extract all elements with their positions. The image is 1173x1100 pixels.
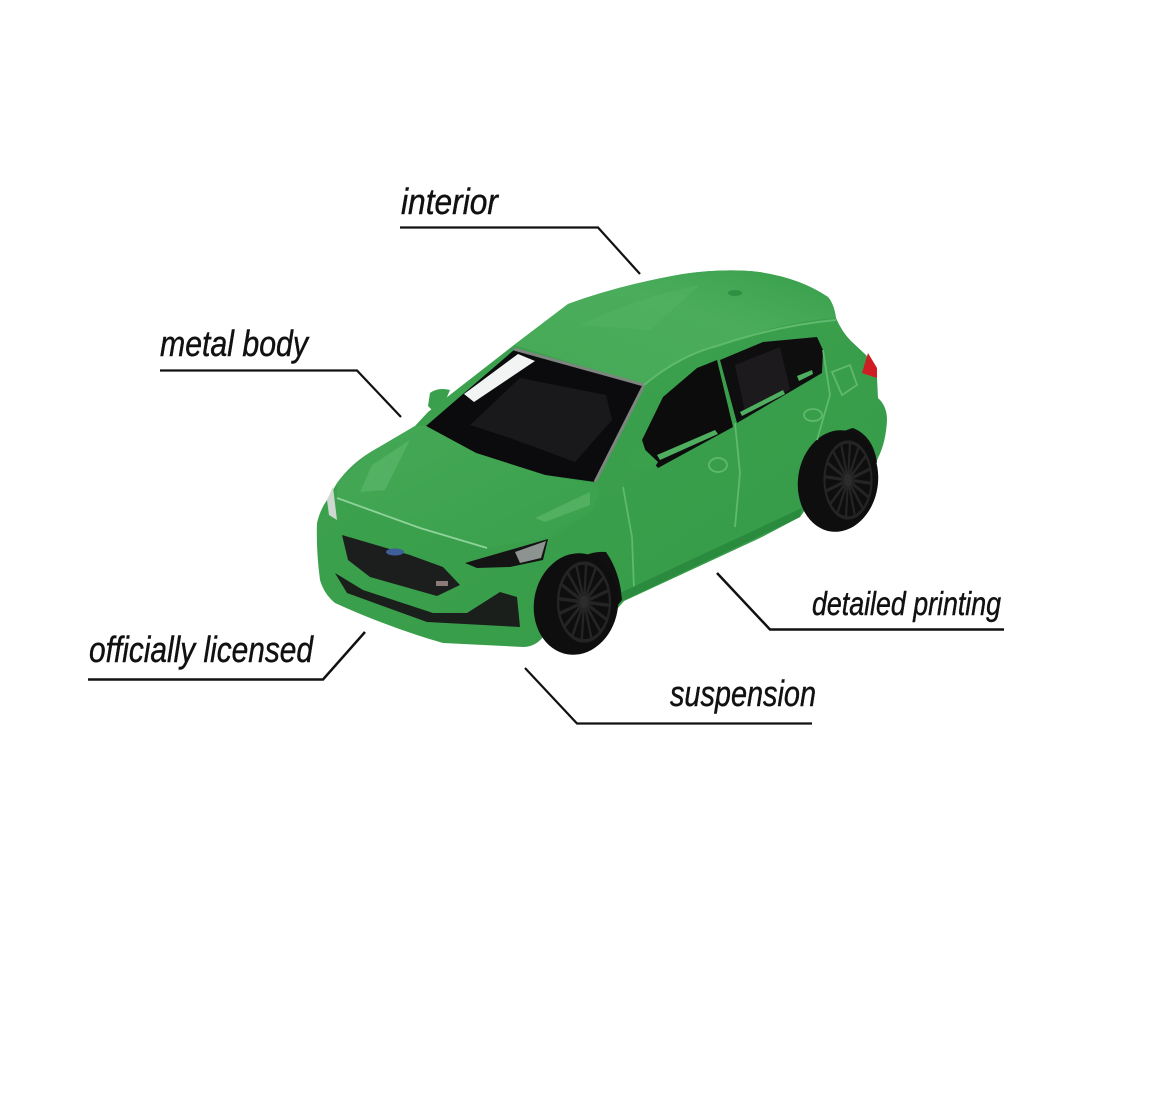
hood [337, 426, 600, 548]
side mirror [627, 445, 658, 470]
windshield reflection [464, 354, 535, 402]
roof highlight [580, 285, 700, 330]
label: officially licensed: officially licensed [89, 629, 314, 670]
headlight glass [515, 541, 546, 563]
ford badge [386, 548, 404, 556]
car [317, 270, 887, 662]
side window rear [720, 337, 823, 423]
rear wheel [791, 425, 885, 537]
label: suspension [525, 668, 816, 724]
hood highlights [360, 440, 590, 522]
label: detailed printing [717, 573, 1004, 630]
windshield interior [470, 378, 612, 462]
label: metal body [160, 323, 401, 417]
lower sill [622, 508, 802, 601]
tail light [862, 353, 877, 378]
windshield frame [514, 349, 644, 482]
rear interior [735, 347, 790, 412]
headlight [465, 539, 548, 568]
roof [514, 270, 836, 385]
label: detailed printing: detailed printing [812, 585, 1002, 622]
side window front [642, 360, 733, 468]
label: suspension: suspension [670, 673, 816, 714]
car body [317, 270, 887, 647]
rear shoulder line [644, 320, 836, 385]
roof vent detail [728, 290, 742, 296]
left headlight [327, 487, 337, 520]
label: interior [400, 181, 640, 274]
door handles, fuel cap and seams [623, 350, 857, 590]
label: metal body: metal body [160, 323, 310, 364]
left mirror [428, 389, 450, 412]
window sill strips [657, 370, 813, 460]
windshield [426, 350, 644, 482]
wheel arch body fill [545, 420, 878, 640]
hood crease [337, 498, 487, 548]
lower intake [335, 573, 520, 627]
st badge [436, 581, 448, 586]
wheel arch shadows [545, 428, 877, 640]
grille [342, 535, 460, 596]
label: interior: interior [401, 181, 500, 222]
front wheel [526, 546, 626, 662]
